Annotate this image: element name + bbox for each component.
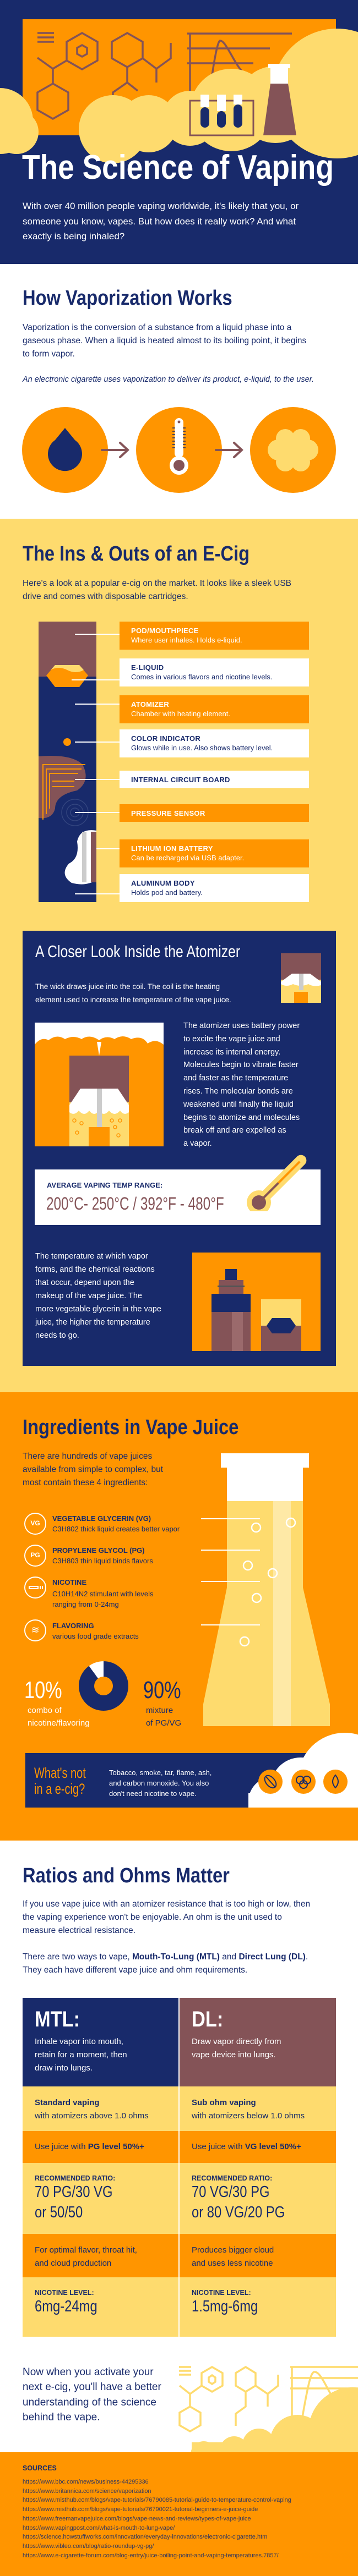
wick text [35,982,231,1004]
comparison table: MTL column: NICOTINE LEVEL: [35,2289,94,2297]
stat: 10% [24,1677,90,1728]
ratios intro text [23,1899,310,1935]
comparison table: MTL column: and cloud production [35,2259,111,2268]
ingredient: PG [24,1545,153,1567]
hero: illustration banner [0,0,358,264]
ingredient: nicotine: ranging from 0-24mg [52,1600,119,1608]
atomizer explanation text: a vapor. [183,1139,212,1148]
heading: Ins & Outs: The Ins & Outs of an E-Cig [23,542,249,565]
ways to vape text [23,1952,308,1975]
wick text: element used to increase the temperature of the vape juice. [35,996,231,1004]
label: pressure sensor: PRESSURE SENSOR [131,809,205,817]
ingredient: flavoring: FLAVORING [52,1622,94,1630]
title: The Science of Vaping [22,149,334,186]
arrow [216,443,242,457]
vaporization text: gaseous phase. When a liquid is heated almost to its boiling point, it begins [23,336,306,345]
comparison table: DL column: Sub ohm vaping [192,2098,256,2107]
label: aluminum body: Holds pod and battery. [131,888,203,897]
illustration: atomizer cross-section [35,1023,164,1146]
ratios intro text: If you use vape juice with an atomizer resistance that is too high or low, then [23,1899,310,1909]
section: ins and outs background [0,519,358,1392]
footer: sources [0,2452,358,2576]
ecig intro text [23,579,291,601]
stat: 90%: 90% [143,1677,181,1704]
vape juice temperature text: The temperature at which vapor [35,1252,148,1261]
callout: temp range [35,1169,321,1225]
closing text [23,2366,161,2423]
atomizer explanation text: break off and are expelled as [183,1126,286,1135]
comparison table: MTL column: 70 PG/30 VG [35,2183,112,2201]
comparison table: MTL column: draw into lungs. [35,2063,93,2073]
ingredients intro: There are hundreds of vape juices [23,1452,152,1461]
callout: what's not in an e-cig: What's not [34,1765,86,1781]
comparison table: DL column: DL: [192,2007,223,2031]
comparison table: DL column: or 80 VG/20 PG [192,2204,285,2221]
ways to vape text: They each have different vape juice and ohm requirements. [23,1965,247,1975]
atomizer explanation text: increase its internal energy. [183,1048,280,1057]
intro text: exactly is being inhaled? [23,231,124,241]
footer: sources: SOURCES [23,2464,57,2472]
footer: sources: https://www.misthub.com/blogs/vape-tutorials/76790085-tutorial-guide-to-temperature-control-vaping [23,2497,291,2503]
comparison table: MTL column: Standard vaping [35,2098,100,2107]
comparison table: DL column [180,1998,336,2337]
ingredient: VG: C3H802 thick liquid creates better vapor [52,1525,180,1533]
footer: sources: https://www.freemanvapejuice.com/blogs/vape-news-and-reviews/types-of-vape-juice [23,2515,251,2522]
vape juice temperature text: more vegetable glycerin in the vape [35,1305,161,1314]
label: aluminum body [120,874,309,902]
illustration: bottles [192,1253,321,1351]
vaporization process diagram [22,407,336,493]
icon: thermometer [247,1155,306,1211]
ingredients intro [23,1452,163,1487]
label: pod/mouthpiece [120,622,309,650]
label: battery [120,839,309,867]
ingredient: PG: PG [30,1551,40,1559]
ingredient: nicotine [24,1577,154,1608]
comparison table: DL column: with atomizers below 1.0 ohms [192,2111,305,2121]
footer: sources: https://www.vapingpost.com/what-is-mouth-to-lung-vape/ [23,2525,175,2531]
ecig intro text: Here's a look at a popular e-cig on the market. It looks like a sleek USB [23,579,291,588]
arrow [102,443,128,457]
wick text: The wick draws juice into the coil. The coil is the heating [35,982,220,991]
comparison table: DL column: Draw vapor directly from [192,2037,281,2046]
label: e-liquid [120,658,309,686]
stat: 90%: mixture [146,1706,173,1715]
footer: sources: https://www.e-cigarette-forum.com/blog-entry/juice-boiling-point-and-vaping-temperatures.7857/ [23,2552,279,2559]
label: color indicator: COLOR INDICATOR [131,734,200,743]
vape juice temperature text: juice, the higher the temperature [35,1318,150,1327]
comparison table: DL column: NICOTINE LEVEL: [192,2289,251,2297]
callout: what's not in an e-cig: don't need nicotine to vape. [109,1789,197,1798]
ingredient: VG: VEGETABLE GLYCERIN (VG) [52,1514,151,1523]
ratios intro text: the vaping experience won't be enjoyable. An ohm is the unit used to [23,1913,282,1922]
vaporization text: to form vapor. [23,349,75,359]
comparison table: MTL column: retain for a moment, then [35,2050,127,2059]
label: battery: LITHIUM ION BATTERY [131,844,213,853]
label: pod/mouthpiece: Where user inhales. Holds e-liquid. [131,636,242,644]
comparison table: DL column: Use juice with VG level 50%+ [192,2142,301,2151]
closing text: behind the vape. [23,2412,100,2423]
vape juice temperature text [35,1252,161,1340]
atomizer explanation text: rises. The molecular bonds are [183,1087,293,1096]
comparison table: DL column: vape device into lungs. [192,2050,276,2059]
icon: vapor cloud [250,407,336,493]
callout: temp range: 200°C- 250°C / 392°F - 480°F [46,1194,224,1213]
closing text: next e-cig, you'll have a better [23,2381,161,2393]
footer: sources: https://www.bbc.com/news/business-44295336 [23,2479,149,2485]
italic note: An electronic cigarette uses vaporization to deliver its product, e-liquid, to the user. [23,375,314,384]
label: aluminum body: ALUMINUM BODY [131,879,195,887]
stat: 90%: of PG/VG [146,1718,181,1728]
atomizer explanation text: begins to atomize and molecules [183,1113,300,1122]
label: color indicator [120,729,309,757]
callout: what's not in an e-cig: Tobacco, smoke, tar, flame, ash, [109,1768,211,1777]
icon: liquid drop [22,407,108,493]
ingredients intro: available from simple to complex, but [23,1465,163,1474]
ingredient: PG: PROPYLENE GLYCOL (PG) [52,1546,145,1555]
intro text: With over 40 million people vaping worldwide, it's likely that you, or [23,201,299,211]
closing text: Now when you activate your [23,2366,154,2378]
label: circuit board [120,771,309,788]
ecig intro text: drive and comes with disposable cartridges. [23,592,188,601]
label: color indicator: Glows while in use. Also shows battery level. [131,744,273,752]
footer: sources: https://www.misthub.com/blogs/vape-tutorials/76790021-tutorial-beginners-e-juice-guide [23,2506,258,2513]
label: e-liquid: Comes in various flavors and nicotine levels. [131,673,273,681]
label: atomizer: ATOMIZER [131,700,169,708]
footer: sources: https://www.britannica.com/science/vaporization [23,2488,151,2495]
illustration: flask [201,1453,330,1726]
vape juice temperature text: makeup of the vape juice. The [35,1292,142,1300]
panel: atomizer close look [23,931,336,1366]
comparison table: DL column: RECOMMENDED RATIO: [192,2174,272,2182]
intro text: someone you know, vapes. But how does it really work? And what [23,216,296,227]
stat: 90% [143,1677,181,1728]
ways to vape text: There are two ways to vape, Mouth-To-Lung (MTL) and Direct Lung (DL). [23,1952,308,1962]
icon: thermometer [136,407,222,493]
atomizer explanation text: and faster as the temperature [183,1074,288,1083]
comparison table: DL column: 70 VG/30 PG [192,2183,269,2201]
label: atomizer: Chamber with heating element. [131,710,230,718]
ingredient: PG: C3H803 thin liquid binds flavors [52,1557,153,1565]
icon: small atomizer [281,953,321,1003]
stat: 10%: 10% [24,1677,62,1704]
label: e-liquid: E-LIQUID [131,663,164,672]
comparison table: MTL column: 6mg-24mg [35,2298,97,2315]
stat: 10%: nicotine/flavoring [28,1718,90,1728]
comparison table: MTL column: or 50/50 [35,2204,83,2221]
comparison table: MTL column: For optimal flavor, throat hit, [35,2245,137,2255]
callout: what's not in an e-cig: and carbon monoxide. You also [109,1779,209,1787]
ingredient: flavoring: various food grade extracts [52,1632,139,1640]
label: circuit board: INTERNAL CIRCUIT BOARD [131,776,230,784]
stat: 10%: combo of [28,1706,62,1715]
e-cig diagram [39,622,120,902]
atomizer explanation text: weakened until finally the liquid [183,1100,294,1109]
callout: what's not in an e-cig: in a e-cig? [34,1781,85,1797]
ingredients intro: most contain these 4 ingredients: [23,1478,148,1487]
comparison table: MTL column: RECOMMENDED RATIO: [35,2174,115,2182]
vaporization text: Vaporization is the conversion of a substance from a liquid phase into a [23,323,291,332]
comparison table: MTL column: MTL: [35,2007,80,2031]
label: battery: Can be recharged via USB adapter. [131,854,244,862]
section: ingredients background [0,1392,358,1841]
comparison table: MTL column: Inhale vapor into mouth, [35,2037,123,2046]
label: pod/mouthpiece: POD/MOUTHPIECE [131,627,199,635]
vaporization text [23,323,306,359]
atomizer explanation text: Molecules begin to vibrate faster [183,1061,299,1069]
atomizer explanation text: The atomizer uses battery power [183,1021,300,1030]
vape juice temperature text: needs to go. [35,1331,79,1340]
ingredient: VG: VG [30,1519,40,1527]
atomizer explanation text [183,1021,300,1148]
intro text [23,201,299,241]
comparison table: MTL column [23,1998,178,2337]
comparison table: MTL column: Use juice with PG level 50%+ [35,2142,144,2151]
ingredient: nicotine: C10H14N2 stimulant with levels [52,1590,154,1598]
comparison table: DL column: and uses less nicotine [192,2259,273,2268]
footer: sources: https://science.howstuffworks.com/innovation/everyday-innovations/electronic-cigarette.htm [23,2534,267,2540]
closing illustration [178,2366,358,2452]
comparison table: DL column: Produces bigger cloud [192,2245,274,2255]
heading: Ratios and Ohms: Ratios and Ohms Matter [23,1864,230,1887]
vape juice temperature text: forms, and the chemical reactions [35,1265,155,1274]
ingredient: flavoring [24,1619,139,1641]
donut chart [79,1661,128,1711]
label: atomizer [120,695,309,723]
comparison table: MTL column: with atomizers above 1.0 ohms [35,2111,149,2121]
label: pressure sensor [120,804,309,822]
atomizer explanation text: to excite the vape juice and [183,1035,280,1043]
ratios intro text: measure electrical resistance. [23,1926,135,1935]
ingredient: flavoring: ≋ [31,1624,40,1635]
heading: Ingredients: Ingredients in Vape Juice [23,1416,238,1439]
ingredient: nicotine: NICOTINE [52,1578,86,1586]
callout: temp range: AVERAGE VAPING TEMP RANGE: [47,1181,162,1189]
vape juice temperature text: that occur, depend upon the [35,1278,134,1287]
heading: How Vaporization Works: How Vaporization Works [23,287,232,310]
atomizer heading: A Closer Look Inside the Atomizer [35,942,240,961]
callout: what's not in an e-cig [25,1733,358,1808]
footer: sources: https://www.vibleo.com/blog/ratio-roundup-vg-pg/ [23,2543,154,2550]
ingredient: VG [24,1513,180,1535]
comparison table: DL column: 1.5mg-6mg [192,2298,258,2315]
closing text: understanding of the science [23,2397,156,2408]
